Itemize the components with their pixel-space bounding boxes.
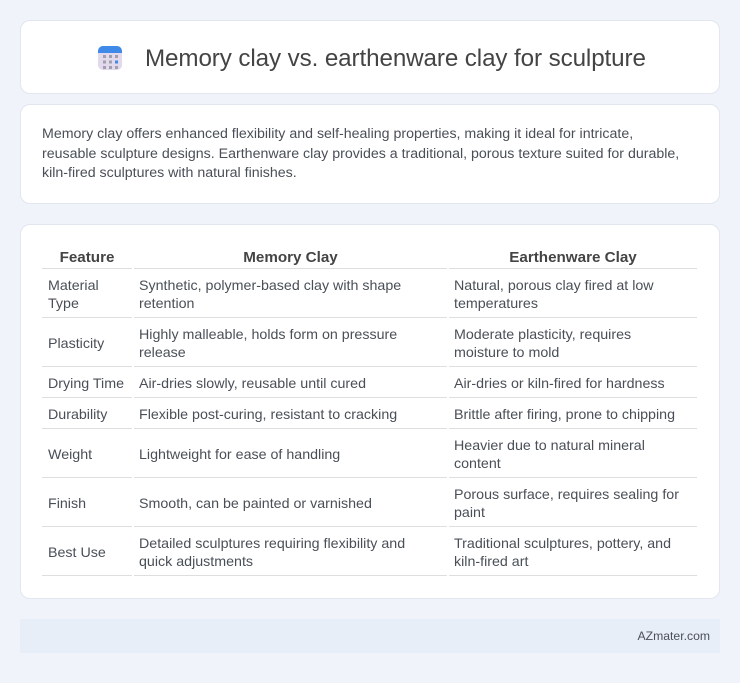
row: weight bbox=[42, 438, 697, 478]
row: finish: paint bbox=[454, 505, 485, 521]
row: weight: Lightweight for ease of handling bbox=[139, 447, 340, 463]
row: drying time: Air-dries or kiln-fired for hardness bbox=[454, 376, 665, 392]
row: drying time: Drying Time bbox=[48, 376, 124, 392]
panel: comparison table bbox=[20, 224, 720, 599]
row: drying time bbox=[42, 376, 697, 398]
title: Memory clay vs. earthenware clay for sculpture bbox=[145, 45, 646, 72]
row: best use: quick adjustments bbox=[139, 554, 253, 570]
row: material type: Material bbox=[48, 278, 99, 294]
row: plasticity: Moderate plasticity, requires bbox=[454, 327, 631, 343]
row: plasticity: release bbox=[139, 345, 186, 361]
icon: calendar bbox=[98, 46, 122, 70]
row: plasticity bbox=[42, 327, 697, 367]
row: weight: content bbox=[454, 456, 501, 472]
row: material type: Synthetic, polymer-based clay with shape bbox=[139, 278, 401, 294]
row: best use: Best Use bbox=[48, 545, 106, 561]
row: material type: retention bbox=[139, 296, 194, 312]
row: finish: Finish bbox=[48, 496, 86, 512]
row: material type: Type bbox=[48, 296, 79, 312]
row: plasticity: moisture to mold bbox=[454, 345, 559, 361]
row: plasticity: Highly malleable, holds form on pressure bbox=[139, 327, 397, 343]
row: best use: kiln-fired art bbox=[454, 554, 528, 570]
table header bbox=[42, 249, 697, 269]
row: best use: Traditional sculptures, pottery, and bbox=[454, 536, 671, 552]
text block: introduction bbox=[42, 126, 679, 181]
row: finish bbox=[42, 487, 697, 527]
row: durability: Brittle after firing, prone to chipping bbox=[454, 407, 675, 423]
text block: introduction: Memory clay offers enhanced flexibility and self-healing properties, making it ideal for intricate, bbox=[42, 126, 633, 142]
footer text: AZmater.com bbox=[638, 629, 710, 643]
footer bar bbox=[20, 619, 720, 653]
row: finish: Porous surface, requires sealing for bbox=[454, 487, 679, 503]
row: durability: Flexible post-curing, resistant to cracking bbox=[139, 407, 397, 423]
row: drying time: Air-dries slowly, reusable until cured bbox=[139, 376, 366, 392]
row: plasticity: Plasticity bbox=[48, 336, 104, 352]
text block: introduction: kiln-fired sculptures with natural finishes. bbox=[42, 165, 297, 181]
row: durability bbox=[42, 407, 697, 429]
text block: introduction: reusable sculpture designs. Earthenware clay provides a traditional, porous texture suited for durable, bbox=[42, 146, 679, 162]
panel: title header bbox=[20, 20, 720, 94]
row: material type bbox=[42, 278, 697, 318]
row: weight: Weight bbox=[48, 447, 92, 463]
table header: Earthenware Clay bbox=[509, 249, 637, 266]
table header: Memory Clay bbox=[243, 249, 338, 266]
table header: Feature bbox=[60, 249, 114, 266]
row: finish: Smooth, can be painted or varnished bbox=[139, 496, 372, 512]
row: weight: Heavier due to natural mineral bbox=[454, 438, 645, 454]
panel: introduction bbox=[20, 104, 720, 204]
row: material type: temperatures bbox=[454, 296, 538, 312]
row: durability: Durability bbox=[48, 407, 107, 423]
row: best use: Detailed sculptures requiring flexibility and bbox=[139, 536, 405, 552]
row: material type: Natural, porous clay fired at low bbox=[454, 278, 654, 294]
